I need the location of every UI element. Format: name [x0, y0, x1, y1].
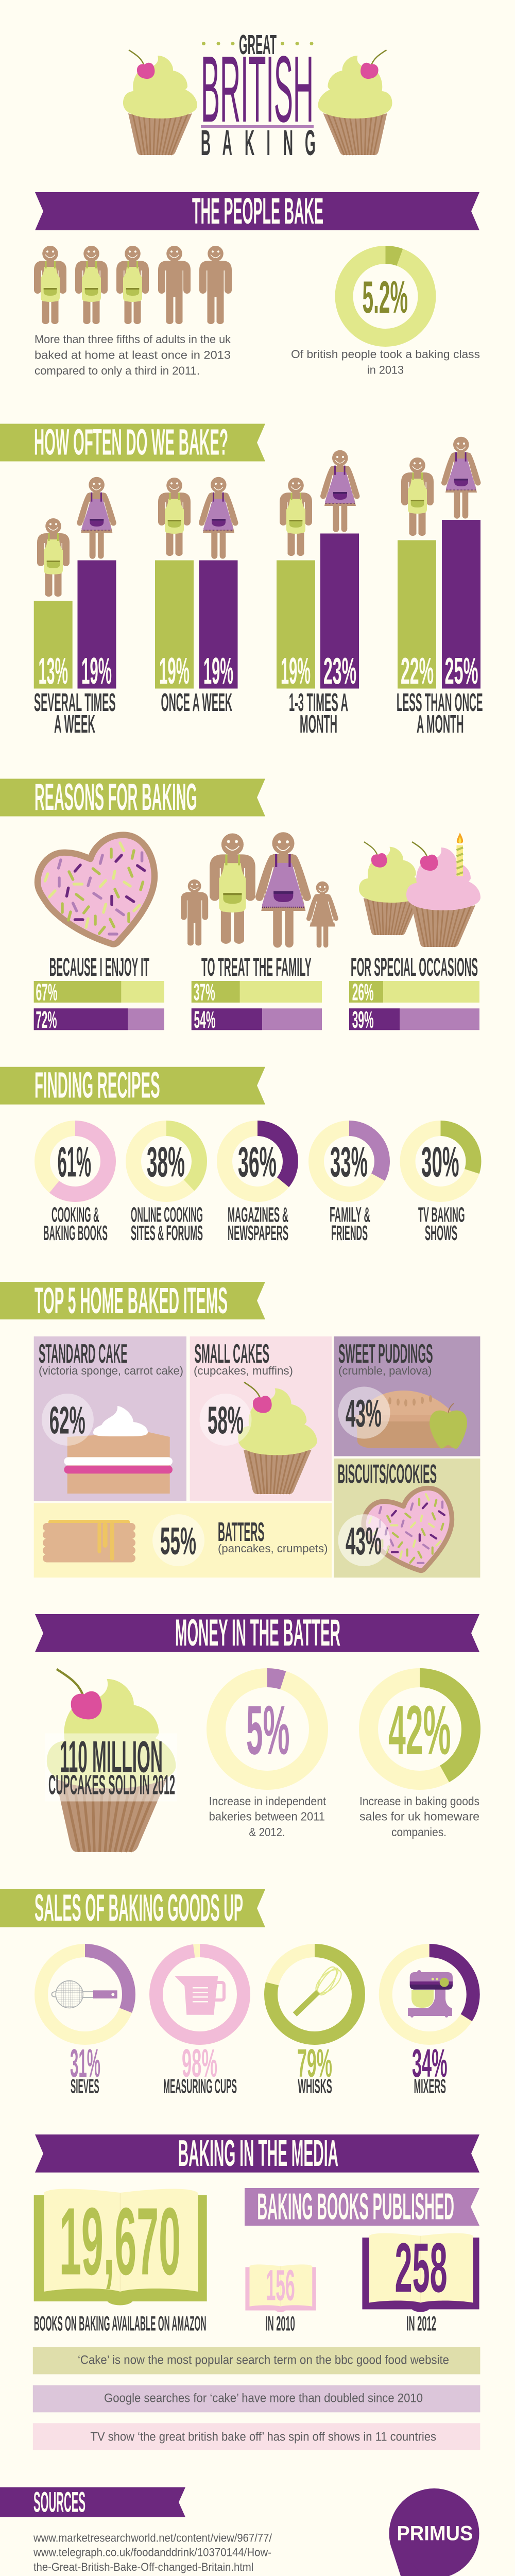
group: less than once a month: 22%: [401, 651, 434, 692]
text: baking class: [291, 348, 480, 376]
icon: whisk: [295, 1964, 345, 2014]
subheading: (cupcakes, muffins): [194, 1364, 293, 1377]
icon: two cupcakes with candle: [359, 833, 480, 947]
bar chart: how often do we bake: 19%: [81, 651, 112, 692]
group: once a week: [155, 477, 238, 717]
banner: sales of baking goods up: [0, 1887, 265, 1929]
text: BOOKS ON BAKING AVAILABLE ON AMAZON: [34, 2312, 206, 2335]
donut chart: family and friends: [316, 1128, 382, 1245]
donut chart: independent bakeries 5%: Increase in independent: [209, 1794, 327, 1808]
title word: baking: BAKING: [201, 123, 316, 163]
translucent label band: [45, 1733, 177, 1801]
value circle: [338, 1387, 390, 1438]
donut chart: baking goods sales 42%: companies.: [391, 1825, 447, 1839]
bars: 37% and 54%: 54%: [194, 1006, 215, 1033]
logo: Great British Baking: GREAT: [239, 29, 277, 60]
bars: 67% and 72%: [34, 979, 164, 1033]
subheading: (crumble, pavlova): [338, 1364, 432, 1377]
panel: for special occasions: [349, 833, 480, 1033]
banner: sources: SOURCES: [33, 2486, 85, 2518]
donut chart: baking goods sales 42%: Increase in baking goods: [359, 1794, 479, 1808]
donut chart: 5.2%: [344, 255, 427, 338]
panel: baking books published: 156: [266, 2261, 295, 2309]
panel: because i enjoy it: [34, 835, 164, 1033]
panel: biscuits and cookies: [334, 1459, 480, 1578]
donut chart: independent bakeries 5%: 5%: [246, 1691, 289, 1769]
panel: sieves: 31%: [70, 2041, 100, 2086]
callout: spin off shows: [33, 2423, 480, 2450]
panel: batters: 55%: [160, 1519, 196, 1563]
group: less than once a month: [397, 437, 483, 738]
donut chart: magazines and newspapers: [225, 1128, 290, 1245]
icon: cake slice: [64, 1406, 173, 1494]
panel: mixers: [386, 1951, 473, 2097]
panel: books on amazon: [34, 2189, 207, 2335]
panel: books on amazon: 19,670: [59, 2189, 181, 2295]
donut chart: family and friends: 33%: [330, 1138, 368, 1185]
banner: reasons for baking: REASONS FOR BAKING: [35, 776, 197, 818]
icon: measuring cup: [175, 1976, 224, 2015]
donut ring 98%: [156, 1951, 244, 2038]
value circle: [152, 1514, 204, 1566]
logo: primus speech bubble: [389, 2488, 479, 2576]
panel: sieves: SIEVES: [71, 2075, 99, 2097]
callout: cake search term: [33, 2347, 480, 2374]
group: 1-3 times a month: MONTH: [300, 710, 337, 738]
bars: 67% and 72%: 67%: [36, 979, 58, 1006]
bars: 26% and 39%: 26%: [352, 979, 374, 1006]
icon: large cupcake: [47, 1669, 176, 1852]
donut chart: independent bakeries 5%: bakeries between 2011: [209, 1809, 325, 1823]
panel: small cakes: [190, 1336, 332, 1501]
icon: right cupcake: [318, 50, 392, 155]
bar chart: how often do we bake: ONCE A WEEK: [161, 689, 232, 717]
text: BAKING BOOKS: [43, 1221, 108, 1245]
bar chart: how often do we bake: SEVERAL TIMES: [34, 689, 115, 717]
panel: mixers: 34%: [412, 2041, 448, 2086]
group: several times a week: [34, 477, 116, 738]
value circle: [338, 1514, 390, 1566]
text: NEWSPAPERS: [228, 1221, 288, 1245]
banner: finding recipes: [0, 1065, 265, 1106]
donut chart: tv baking shows: [408, 1128, 474, 1245]
callout: google searches: Google searches for ‘cake’ have more than doubled since 2010: [104, 2392, 423, 2405]
icon: heart cookie: [38, 835, 154, 944]
text: TOP 5 HOME BAKED ITEMS: [35, 1281, 228, 1321]
panel: whisks: [271, 1951, 358, 2097]
text: COOKING &: [52, 1203, 99, 1227]
text: BECAUSE I ENJOY IT: [49, 953, 149, 981]
panel: mixers: MIXERS: [414, 2075, 446, 2097]
banner: top 5 home baked items: [0, 1281, 265, 1321]
donut chart: tv baking shows: 30%: [421, 1138, 459, 1185]
panel: standard cake: STANDARD CAKE: [39, 1339, 128, 1369]
banner: the people bake: [35, 191, 479, 232]
donut chart: cooking and baking books: 61%: [58, 1138, 91, 1185]
text: MAGAZINES &: [228, 1203, 288, 1227]
bars: 26% and 39%: [349, 979, 479, 1033]
donut ring 34%: [386, 1951, 473, 2038]
text: HOW OFTEN DO WE BAKE?: [34, 422, 228, 463]
logo: Great British Baking: [123, 29, 392, 163]
title underline: [201, 125, 314, 128]
icon: book 2012: [362, 2233, 479, 2312]
icon: pie and apple: [355, 1391, 467, 1449]
value circle: [42, 1394, 94, 1446]
icon: stand mixer: [408, 1970, 453, 2018]
text: three fifths: [35, 333, 231, 377]
panel: baking books published: 258: [395, 2228, 448, 2307]
donut chart: family and friends: FRIENDS: [331, 1221, 368, 1245]
banner: finding recipes: FINDING RECIPES: [35, 1065, 160, 1106]
donut chart: online cooking sites: [131, 1128, 203, 1245]
icon: open book: [34, 2189, 207, 2305]
icon: sieve: [52, 1980, 117, 2008]
panel: small cakes: 58%: [208, 1398, 244, 1442]
text: three fifths: compared to only a third in 2011.: [35, 364, 200, 377]
text: CUPCAKES SOLD IN 2012: [48, 1769, 175, 1800]
text: baking class: in 2013: [367, 364, 404, 376]
bar chart: how often do we bake: 1-3 TIMES A: [289, 689, 348, 717]
banner: how often do we bake: [0, 422, 265, 463]
callout: spin off shows: TV show ‘the great british bake off’ has spin off shows in 11 countries: [90, 2430, 436, 2444]
bar chart: how often do we bake: 23%: [323, 651, 356, 692]
panel: standard cake: [34, 1336, 186, 1501]
panel: baking class donut: [291, 255, 480, 376]
logo: primus speech bubble: PRIMUS: [397, 2522, 473, 2545]
panel: people who bake: [34, 246, 232, 377]
bar chart: how often do we bake: 19%: [203, 651, 233, 692]
bars: 67% and 72%: 72%: [36, 1006, 57, 1033]
group: 1-3 times a month: 19%: [281, 651, 311, 692]
icon: gingerbread family: [181, 832, 336, 948]
banner: money in the batter: [35, 1612, 479, 1654]
text block: source list: [33, 2531, 272, 2576]
decorative dots: [202, 42, 313, 45]
banner: baking in the media: [35, 2133, 479, 2174]
subheading: (victoria sponge, carrot cake): [39, 1364, 183, 1377]
icon: pancake stack: [43, 1520, 135, 1562]
icon: small book 2010: [245, 2264, 316, 2312]
text: SITES & FORUMS: [131, 1221, 203, 1245]
group: once a week: 19%: [159, 651, 190, 692]
donut chart: baking goods sales 42%: sales for uk homeware: [359, 1809, 479, 1823]
panel: 110 million cupcakes: [45, 1669, 177, 1852]
group: several times a week: 13%: [38, 651, 68, 692]
value circle: [200, 1394, 251, 1446]
panel: baking books published: [245, 2186, 479, 2335]
panel: to treat the family: [181, 832, 336, 1033]
icon: five gingerbread people: [34, 246, 232, 324]
text block: source list: www.telegraph.co.uk/foodanddrink/10370144/How-: [33, 2546, 271, 2559]
panel: whisks: 79%: [297, 2041, 332, 2086]
panel: biscuits and cookies: 43%: [346, 1519, 382, 1563]
group: several times a week: A WEEK: [54, 710, 95, 738]
bars: 37% and 54%: [192, 979, 322, 1033]
donut chart: tv baking shows: SHOWS: [425, 1221, 457, 1245]
text block: source list: www.marketresearchworld.net/content/view/967/77/: [33, 2531, 272, 2544]
bar chart: how often do we bake: [34, 437, 483, 738]
panel: whisks: WHISKS: [298, 2075, 332, 2097]
text: three fifths: More than three fifths of adults in the uk: [35, 333, 231, 346]
panel: measuring cups: 98%: [182, 2041, 217, 2086]
panel: batters: BATTERS: [218, 1517, 264, 1547]
donut chart: baking goods sales 42%: [359, 1677, 479, 1839]
panel: sweet puddings: 43%: [346, 1392, 382, 1435]
donut chart: independent bakeries 5%: [209, 1677, 327, 1839]
text block: source list: the-Great-British-Bake-Off-changed-Britain.html: [33, 2561, 253, 2573]
donut chart: independent bakeries 5%: & 2012.: [249, 1825, 285, 1839]
donut chart: magazines and newspapers: 36%: [238, 1138, 277, 1185]
banner: reasons for baking: [0, 776, 265, 818]
group: 1-3 times a month: [277, 450, 359, 738]
panel: sweet puddings: [334, 1336, 480, 1456]
text: baking class: Of british people took a baking class: [291, 348, 480, 361]
panel: standard cake: 62%: [49, 1398, 85, 1442]
callout: cake search term: ‘Cake’ is now the most popular search term on the bbc good food website: [78, 2353, 449, 2367]
panel: baking books published: IN 2012: [406, 2312, 436, 2335]
subheading: (pancakes, crumpets): [218, 1542, 328, 1555]
callout: google searches: [33, 2385, 480, 2412]
text: three fifths: baked at home at least once in 2013: [35, 348, 231, 362]
icon: left cupcake: [123, 50, 197, 155]
text: MEASURING CUPS: [163, 2075, 237, 2097]
icon: heart cookie: [364, 1488, 452, 1571]
panel: measuring cups: [156, 1951, 244, 2097]
panel: baking books published: IN 2010: [265, 2312, 295, 2335]
panel: small cakes: SMALL CAKES: [195, 1339, 269, 1369]
panel: baking class donut: 5.2%: [363, 272, 408, 323]
bars: 26% and 39%: 39%: [352, 1006, 374, 1033]
donut ring 31%: [41, 1951, 129, 2038]
icon: cupcake: [238, 1382, 317, 1494]
text: 110 MILLION: [60, 1732, 163, 1782]
donut chart: family and friends: FAMILY &: [330, 1203, 370, 1227]
donut ring 79%: [271, 1951, 358, 2038]
bars: 37% and 54%: 37%: [194, 979, 215, 1006]
panel: sieves: [41, 1951, 129, 2097]
donut chart: cooking and baking books: [42, 1128, 108, 1245]
text: ONLINE COOKING: [131, 1203, 203, 1227]
donut chart: online cooking sites: 38%: [147, 1138, 185, 1185]
text: TO TREAT THE FAMILY: [201, 953, 312, 981]
panel: batters: [34, 1503, 332, 1578]
